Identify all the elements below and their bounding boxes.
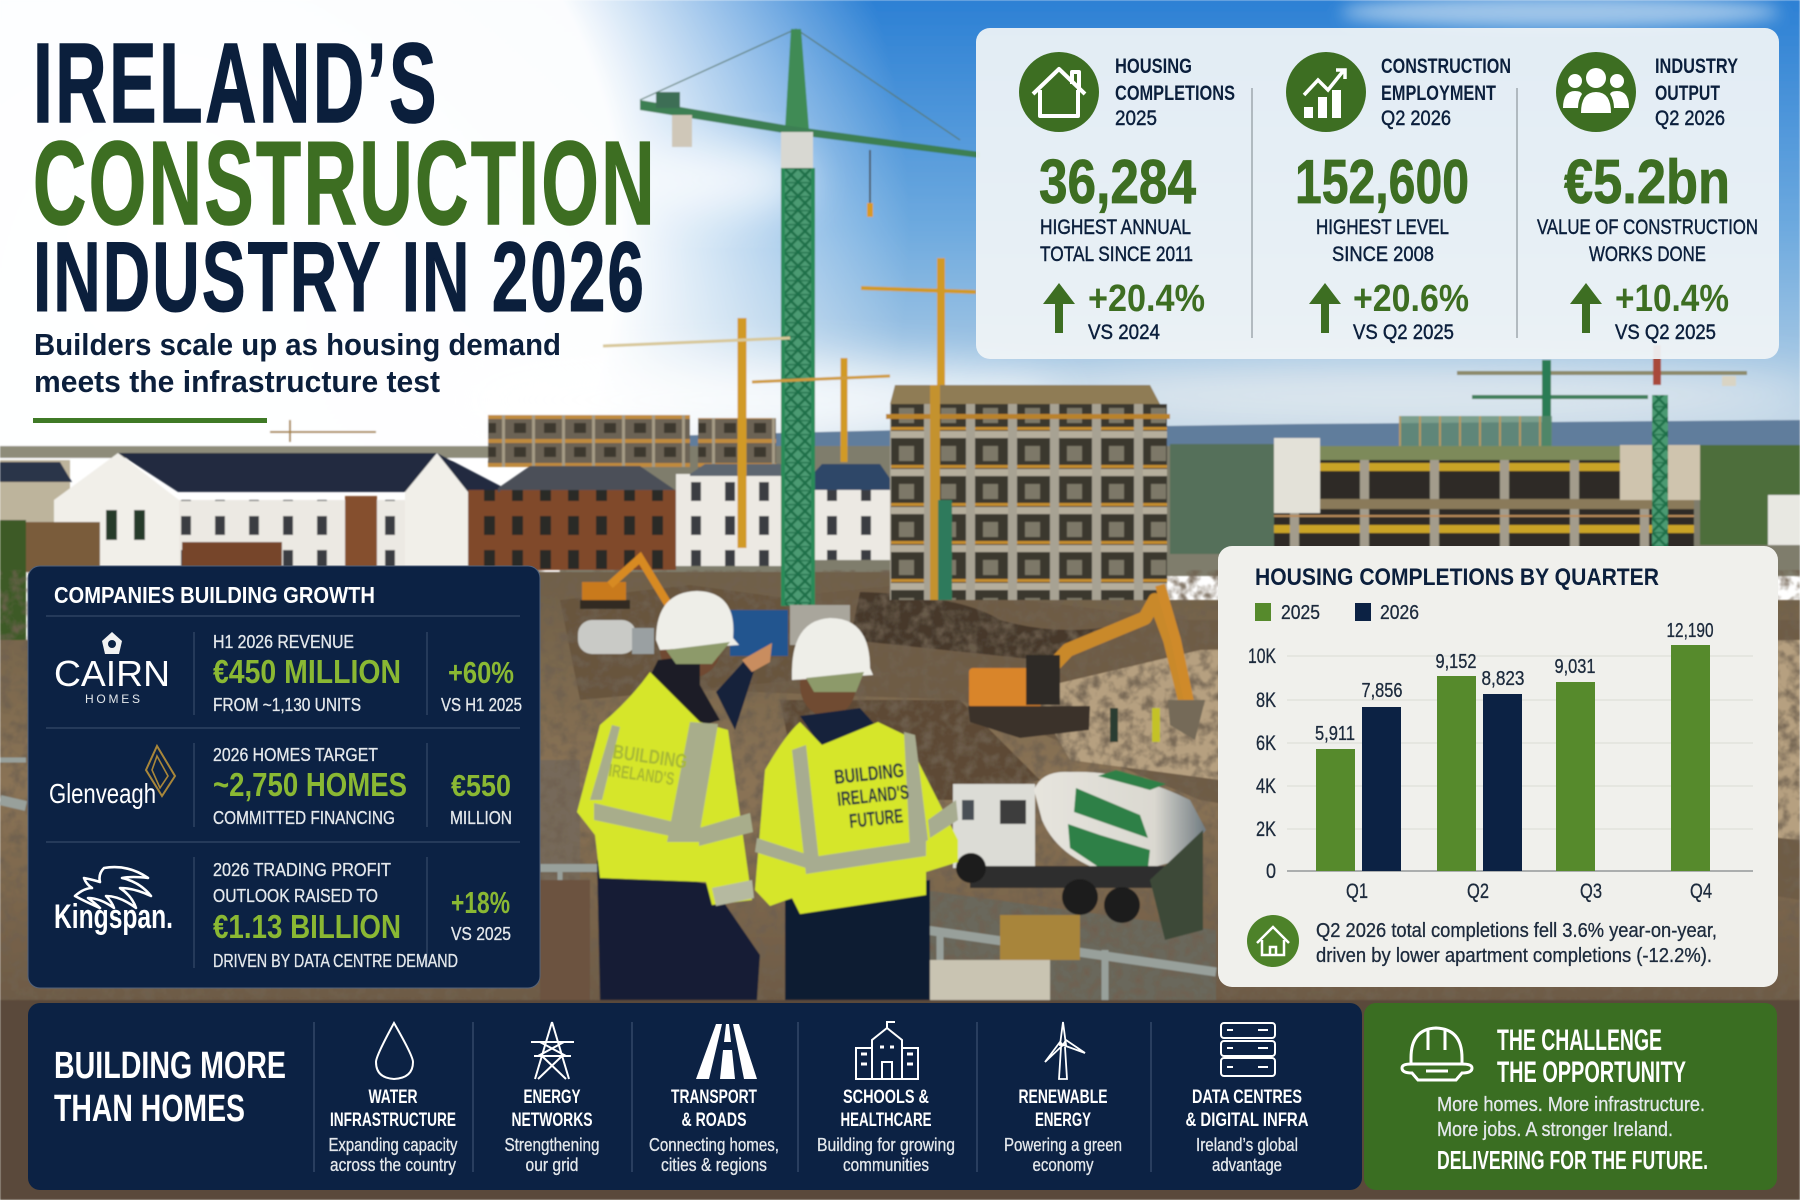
panel: building more than homes: [28, 1003, 1362, 1190]
stat: construction employment: 152,600: [1295, 148, 1469, 217]
stat: housing completions: HIGHEST ANNUAL: [1040, 216, 1191, 239]
title: Ireland's: IRELAND’S: [33, 20, 439, 146]
item: energy networks: ENERGY: [524, 1087, 581, 1108]
row: Glenveagh: MILLION: [450, 808, 512, 828]
right cranes: [1457, 345, 1747, 460]
panel heading: THAN HOMES: [54, 1088, 245, 1130]
title rule: [33, 418, 267, 423]
logo: Glenveagh: Glenveagh: [49, 778, 156, 809]
item: renewable energy: Powering a green: [1004, 1135, 1122, 1155]
logo: Kingspan: [54, 867, 173, 936]
stat: housing completions: 2025: [1115, 107, 1157, 130]
item: schools and healthcare: Building for growing: [817, 1135, 955, 1155]
logo: Glenveagh: [49, 746, 175, 809]
yellow tower cranes: [270, 258, 976, 548]
row: Glenveagh: €550: [451, 768, 511, 803]
row: Cairn Homes: FROM ~1,130 UNITS: [213, 695, 361, 715]
title: Industry in 2026: INDUSTRY IN 2026: [33, 221, 646, 332]
bar chart: Q2: [1467, 880, 1489, 903]
main scaffolded tower block: [886, 385, 1170, 600]
mixer truck: [953, 770, 1206, 940]
stat: construction employment: Q2 2026: [1381, 107, 1451, 130]
stat: industry output: OUTPUT: [1655, 82, 1720, 105]
small excavator: [580, 558, 668, 609]
bar chart: [1248, 620, 1753, 903]
concrete mixer background: [578, 605, 850, 656]
bar chart: Q3: [1580, 880, 1602, 903]
panel: the challenge, the opportunity: THE CHALLENGE: [1497, 1024, 1662, 1057]
icon: people: [1556, 52, 1636, 132]
jacket lettering: [833, 760, 910, 833]
panel heading: [54, 1045, 286, 1130]
stat: construction employment: EMPLOYMENT: [1381, 82, 1496, 105]
legend: [1255, 602, 1419, 624]
icon: hard hat: [1402, 1028, 1472, 1080]
item: data centres: & DIGITAL INFRA: [1186, 1110, 1309, 1131]
item: water infrastructure: INFRASTRUCTURE: [330, 1110, 456, 1131]
item: transport and roads: TRANSPORT: [671, 1087, 757, 1108]
icon: wind turbine: [1045, 1022, 1085, 1079]
item: schools and healthcare: [817, 1022, 955, 1175]
stat: industry output: Q2 2026: [1655, 107, 1725, 130]
stat: construction employment: [1286, 52, 1511, 344]
back text faint: BUILDING: [611, 741, 689, 773]
item: transport and roads: Connecting homes,: [649, 1135, 779, 1155]
row: Kingspan: VS 2025: [451, 924, 511, 944]
item: energy networks: Strengthening: [504, 1135, 600, 1155]
bar chart: 9,031: [1554, 656, 1596, 678]
stat: housing completions: +20.4%: [1088, 278, 1205, 320]
panel: key stats: [976, 28, 1779, 359]
stat: industry output: INDUSTRY: [1655, 55, 1738, 78]
worker left: [577, 591, 772, 1000]
stat: industry output: +10.4%: [1615, 278, 1729, 320]
icon: school building: [856, 1022, 918, 1079]
item: energy networks: our grid: [526, 1155, 578, 1175]
row: Kingspan: 2026 TRADING PROFIT: [213, 860, 391, 880]
panel: the challenge, the opportunity: More jobs. A stronger Ireland.: [1437, 1119, 1673, 1141]
item: schools and healthcare: communities: [843, 1155, 929, 1175]
chart note: driven by lower apartment completions (-12.2%).: [1316, 945, 1712, 967]
stat: housing completions: COMPLETIONS: [1115, 82, 1235, 105]
stat: construction employment: HIGHEST LEVEL: [1316, 216, 1449, 239]
chart note: [1247, 915, 1717, 967]
stat: housing completions: HOUSING: [1115, 55, 1192, 78]
stat: housing completions: [1019, 52, 1235, 344]
row: Glenveagh: COMMITTED FINANCING: [213, 808, 395, 828]
far scaffolded blocks: [488, 415, 776, 468]
small green block: [1170, 444, 1274, 554]
icon: house: [1247, 915, 1299, 967]
row: Kingspan: [54, 860, 511, 971]
row: Glenveagh: [49, 745, 512, 828]
row: Cairn Homes: €450 MILLION: [213, 653, 401, 690]
icon: rising chart: [1286, 52, 1366, 132]
stat: construction employment: +20.6%: [1353, 278, 1469, 320]
item: water infrastructure: Expanding capacity: [328, 1135, 458, 1155]
bar chart: 0: [1266, 860, 1276, 883]
subtitle: [34, 327, 561, 399]
icon: water drop: [376, 1023, 413, 1079]
item: transport and roads: & ROADS: [682, 1110, 746, 1131]
row: Cairn Homes: +60%: [448, 655, 514, 690]
panel: the challenge, the opportunity: More homes. More infrastructure.: [1437, 1094, 1705, 1116]
item: transport and roads: [649, 1024, 779, 1175]
row: Cairn Homes: [54, 632, 522, 715]
stat: industry output: WORKS DONE: [1589, 243, 1706, 266]
bar chart: 5,911: [1315, 723, 1355, 745]
bar chart: 8,823: [1482, 668, 1524, 690]
bar chart: 9,152: [1436, 651, 1476, 673]
bar chart: Q1: [1346, 880, 1368, 903]
bar chart: 12,190: [1666, 620, 1714, 642]
bar chart: 10K: [1248, 645, 1276, 668]
item: data centres: Ireland’s global: [1196, 1135, 1298, 1155]
icon: house: [1019, 52, 1099, 132]
icon: pylon: [531, 1022, 574, 1079]
row: Kingspan: €1.13 BILLION: [213, 908, 401, 945]
stat: construction employment: VS Q2 2025: [1353, 321, 1454, 344]
stat: industry output: €5.2bn: [1564, 148, 1730, 217]
jacket lettering: BUILDING: [833, 760, 905, 789]
panel: companies building growth: [28, 566, 540, 988]
icon: road: [696, 1024, 757, 1079]
logo: Cairn Homes: HOMES: [85, 692, 140, 706]
panel: housing completions chart: [1218, 546, 1778, 987]
large excavator: [968, 585, 1205, 742]
row: Kingspan: DRIVEN BY DATA CENTRE DEMAND: [213, 951, 458, 971]
bar chart: Q4: [1690, 880, 1712, 903]
safety railing: [0, 760, 1216, 1000]
stat: housing completions: VS 2024: [1088, 321, 1160, 344]
item: renewable energy: economy: [1032, 1155, 1094, 1175]
title: Construction: CONSTRUCTION: [33, 117, 657, 250]
bar chart: 2K: [1256, 818, 1276, 841]
logo: Cairn Homes: CAIRN: [54, 653, 170, 694]
stat: housing completions: TOTAL SINCE 2011: [1040, 243, 1193, 266]
icon: servers: [1221, 1023, 1275, 1076]
subtitle: Builders scale up as housing demand: [34, 327, 561, 362]
bar chart: 8K: [1256, 689, 1276, 712]
row: Kingspan: OUTLOOK RAISED TO: [213, 886, 378, 906]
title block: [33, 20, 657, 423]
item: schools and healthcare: HEALTHCARE: [840, 1110, 932, 1131]
panel: the challenge, the opportunity: [1364, 1003, 1777, 1190]
panel heading: COMPANIES BUILDING GROWTH: [54, 582, 375, 608]
item: energy networks: NETWORKS: [512, 1110, 592, 1131]
stat: industry output: VS Q2 2025: [1615, 321, 1716, 344]
item: schools and healthcare: SCHOOLS &: [843, 1087, 929, 1108]
worker right: [755, 618, 958, 1000]
stat: housing completions: 36,284: [1039, 148, 1196, 217]
item: water infrastructure: [328, 1023, 458, 1175]
row: Cairn Homes: VS H1 2025: [441, 695, 522, 715]
stat: construction employment: CONSTRUCTION: [1381, 55, 1511, 78]
item: renewable energy: [1004, 1022, 1122, 1175]
chart note: Q2 2026 total completions fell 3.6% year-on-year,: [1316, 920, 1717, 942]
item: data centres: [1186, 1023, 1309, 1175]
left terrace houses: [0, 453, 898, 640]
worker left: IRELAND'S: [607, 760, 676, 789]
legend: 2026: [1380, 602, 1419, 624]
arrow: up: [1570, 283, 1602, 333]
arrow: up: [1309, 283, 1341, 333]
chart heading: HOUSING COMPLETIONS BY QUARTER: [1255, 564, 1659, 591]
logo: Kingspan: Kingspan.: [54, 898, 173, 936]
jacket lettering: FUTURE: [848, 805, 904, 833]
item: water infrastructure: across the country: [330, 1155, 456, 1175]
item: energy networks: [504, 1022, 600, 1175]
item: data centres: advantage: [1212, 1155, 1282, 1175]
item: renewable energy: RENEWABLE: [1018, 1087, 1108, 1108]
ground: [0, 640, 30, 1000]
panel: the challenge, the opportunity: THE OPPORTUNITY: [1497, 1056, 1686, 1089]
right scaffolded building: [1274, 395, 1800, 550]
row: Glenveagh: 2026 HOMES TARGET: [213, 745, 378, 765]
logo: Cairn Homes: [54, 632, 170, 706]
row: Glenveagh: ~2,750 HOMES: [213, 766, 407, 803]
jacket lettering: IRELAND'S: [836, 782, 910, 811]
item: renewable energy: ENERGY: [1035, 1110, 1091, 1131]
bar chart: 6K: [1256, 732, 1276, 755]
panel heading: BUILDING MORE: [54, 1045, 286, 1087]
bar chart: 4K: [1256, 775, 1276, 798]
subtitle: meets the infrastructure test: [34, 364, 440, 399]
row: Kingspan: +18%: [451, 885, 510, 920]
item: data centres: DATA CENTRES: [1192, 1087, 1302, 1108]
tower crane: main green: [640, 29, 980, 606]
legend: 2025: [1281, 602, 1320, 624]
row: Cairn Homes: H1 2026 REVENUE: [213, 632, 354, 652]
stat: construction employment: SINCE 2008: [1332, 243, 1434, 266]
item: transport and roads: cities & regions: [661, 1155, 767, 1175]
bar chart: 7,856: [1362, 680, 1402, 702]
item: water infrastructure: WATER: [368, 1087, 418, 1108]
arrow: up: [1043, 283, 1075, 333]
stat: industry output: [1537, 52, 1758, 344]
